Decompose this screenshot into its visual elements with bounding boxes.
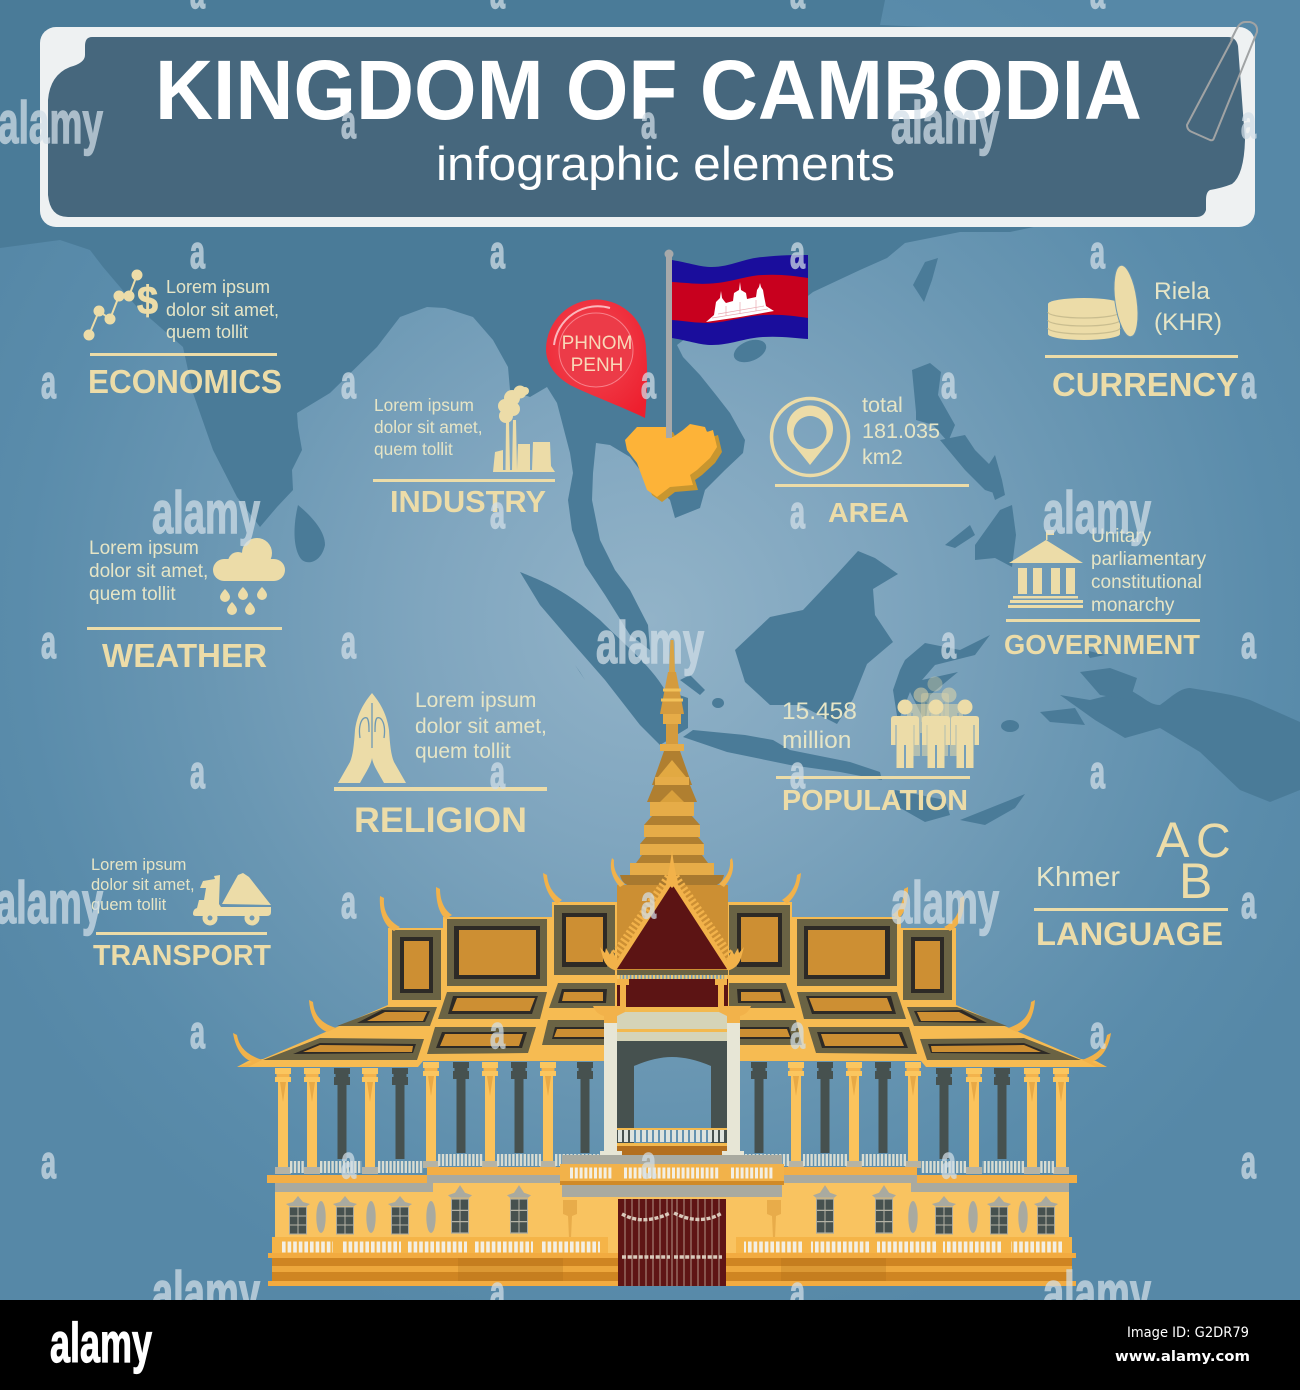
header banner — [40, 22, 1257, 227]
watermark pattern: a — [490, 1266, 505, 1318]
heading: LANGUAGE — [1036, 916, 1223, 952]
white portico pillars — [593, 1006, 751, 1157]
map: Sulawesi — [893, 635, 990, 722]
watermark pattern: a — [1241, 1136, 1256, 1188]
panel: industry — [373, 386, 555, 519]
watermark pattern: a — [490, 226, 505, 278]
map: small islands near Sumatra — [575, 665, 724, 708]
watermark pattern: a — [1241, 356, 1256, 408]
watermark pattern: a — [190, 226, 205, 278]
watermark pattern: a — [790, 226, 805, 278]
watermark pattern: a — [1090, 746, 1105, 798]
flag of Cambodia on pole — [664, 250, 808, 438]
text: quem tollit — [374, 439, 453, 459]
world map: southeast Asia landmasses — [0, 0, 1300, 825]
gable pediment — [600, 850, 744, 971]
title: KINGDOM OF CAMBODIA — [155, 43, 1142, 137]
text: parliamentary — [1091, 549, 1207, 570]
text: quem tollit — [166, 322, 248, 342]
text: constitutional — [1091, 572, 1202, 593]
watermark pattern: a — [941, 356, 956, 408]
central gate — [618, 1199, 726, 1286]
palace left wing — [233, 873, 623, 1286]
heading: CURRENCY — [1052, 366, 1238, 403]
icon: growth chart with dollar — [84, 270, 158, 340]
watermark pattern: a — [641, 96, 656, 148]
watermark pattern: a — [641, 356, 656, 408]
panel: currency — [1045, 264, 1238, 403]
heading: AREA — [828, 497, 909, 528]
watermark pattern: a — [790, 746, 805, 798]
horned finials — [611, 858, 733, 887]
map: Sri Lanka — [295, 505, 325, 562]
text: Lorem ipsum — [415, 689, 536, 712]
watermark pattern: alamy — [891, 870, 999, 936]
portico arch — [617, 1040, 728, 1144]
heading: TRANSPORT — [93, 940, 271, 972]
flagpole — [664, 250, 674, 438]
map marker: Cambodia shape — [625, 424, 722, 502]
icon: dump truck — [193, 873, 271, 926]
panel: religion — [334, 689, 547, 840]
text: km2 — [862, 444, 903, 469]
icon: praying hands — [338, 693, 406, 783]
text: quem tollit — [415, 740, 511, 763]
watermark pattern: alamy — [0, 870, 103, 936]
watermark pattern: a — [490, 486, 505, 538]
map: Java and Sunda — [683, 730, 1025, 825]
map: Asia mainland — [0, 0, 1240, 650]
watermark pattern: a — [341, 876, 356, 928]
flag red band — [672, 275, 808, 323]
watermark pattern: a — [341, 616, 356, 668]
text: quem tollit — [91, 896, 167, 914]
watermark pattern: a — [1090, 226, 1105, 278]
central spire — [620, 640, 724, 886]
icon: group of people — [891, 676, 979, 768]
watermark pattern: a — [41, 356, 56, 408]
banner panel — [48, 37, 1245, 217]
icon: letters: C — [1196, 815, 1231, 868]
watermark pattern: a — [790, 486, 805, 538]
capital pin: Phnom Penh — [546, 300, 647, 418]
watermark pattern: a — [641, 1136, 656, 1188]
text: monarchy — [1091, 595, 1175, 616]
text: 181.035 — [862, 418, 940, 443]
capital pin: Phnom Penh: PHNOM — [562, 333, 632, 354]
watermark pattern: alamy — [152, 480, 260, 546]
text: dolor sit amet, — [91, 876, 195, 894]
text: Unitary — [1091, 526, 1152, 547]
footer url: www.alamy.com — [1115, 1349, 1250, 1365]
text: Khmer — [1036, 861, 1120, 892]
heading: ECONOMICS — [88, 363, 282, 400]
text: total — [862, 392, 903, 417]
watermark pattern: a — [341, 96, 356, 148]
text: Lorem ipsum — [166, 277, 270, 297]
gable frieze — [617, 970, 728, 1007]
map: Borneo — [735, 551, 898, 724]
text: Lorem ipsum — [89, 538, 199, 559]
watermark pattern: a — [41, 616, 56, 668]
icon: growth chart with dollar: $ — [137, 279, 158, 323]
text: Lorem ipsum — [374, 395, 474, 415]
map: Taiwan — [913, 258, 938, 302]
capital pin: Phnom Penh: PENH — [571, 355, 623, 376]
map: New Guinea — [1060, 688, 1300, 802]
text: 15.458 — [782, 698, 857, 725]
text: quem tollit — [89, 584, 176, 605]
text: dolor sit amet, — [89, 561, 208, 582]
map: Sumatra — [520, 572, 688, 745]
map: Moluccas — [1001, 650, 1137, 732]
watermark pattern: a — [490, 1006, 505, 1058]
panel: government — [1004, 526, 1207, 660]
footer image id: Image ID: G2DR79 — [1127, 1325, 1249, 1341]
flag blue field — [672, 255, 808, 345]
watermark pattern: a — [941, 616, 956, 668]
watermark pattern: a — [341, 356, 356, 408]
footer logo: alamy — [50, 1311, 152, 1374]
flag temple emblem — [706, 282, 774, 322]
watermark pattern: a — [190, 746, 205, 798]
icon: letters — [1156, 812, 1231, 909]
Royal Palace building — [233, 640, 1111, 1286]
watermark pattern: alamy — [152, 1260, 260, 1326]
watermark pattern: a — [790, 1006, 805, 1058]
watermark pattern: a — [941, 1136, 956, 1188]
text: dolor sit amet, — [166, 300, 279, 320]
heading: INDUSTRY — [390, 484, 546, 519]
watermark pattern: a — [1241, 96, 1256, 148]
text: dolor sit amet, — [415, 715, 547, 738]
icon: factory — [493, 386, 555, 472]
watermark pattern: a — [190, 1006, 205, 1058]
subtitle: infographic elements — [436, 137, 895, 190]
watermark pattern: alamy — [1043, 480, 1151, 546]
portico beam — [617, 1007, 728, 1041]
panel: population — [776, 676, 979, 817]
palace right wing — [721, 873, 1111, 1286]
heading: RELIGION — [354, 801, 527, 840]
central gable body — [617, 885, 728, 972]
icon: letters: A — [1156, 812, 1190, 868]
watermark pattern: a — [790, 1266, 805, 1318]
banner paper — [40, 27, 1255, 227]
panel: language — [1034, 812, 1231, 952]
footer bar — [0, 1300, 1300, 1390]
heading: POPULATION — [782, 785, 968, 817]
text: million — [782, 727, 851, 754]
watermark pattern: a — [641, 876, 656, 928]
icon: coins — [1048, 264, 1142, 340]
icon: parliament building — [1008, 530, 1083, 608]
icon: rain cloud — [213, 538, 285, 615]
paperclip — [1187, 22, 1257, 140]
icon: letters: B — [1179, 853, 1212, 909]
panel: transport — [91, 856, 271, 972]
portico balcony railing — [617, 1128, 728, 1155]
heading: WEATHER — [102, 637, 267, 674]
watermark pattern: alamy — [1043, 1260, 1151, 1326]
watermark pattern: a — [1090, 1006, 1105, 1058]
watermark pattern: a — [1241, 876, 1256, 928]
text: (KHR) — [1154, 309, 1222, 336]
text: Lorem ipsum — [91, 856, 186, 874]
watermark pattern: a — [41, 1136, 56, 1188]
map: Hainan — [730, 335, 770, 367]
watermark pattern: alamy — [891, 90, 999, 156]
watermark pattern: a — [341, 1136, 356, 1188]
map: Philippines — [912, 363, 1016, 567]
text: Riela — [1154, 278, 1210, 305]
watermark pattern: a — [1241, 616, 1256, 668]
panel: area — [772, 392, 969, 528]
central terrace — [560, 1155, 784, 1200]
watermark pattern: a — [490, 746, 505, 798]
icon: location pin in ring — [772, 398, 848, 476]
panel: economics — [84, 270, 282, 400]
watermark pattern: alamy — [596, 610, 704, 676]
heading: GOVERNMENT — [1004, 629, 1200, 660]
watermark pattern: alamy — [0, 90, 103, 156]
panel: weather — [87, 538, 285, 674]
text: dolor sit amet, — [374, 417, 483, 437]
